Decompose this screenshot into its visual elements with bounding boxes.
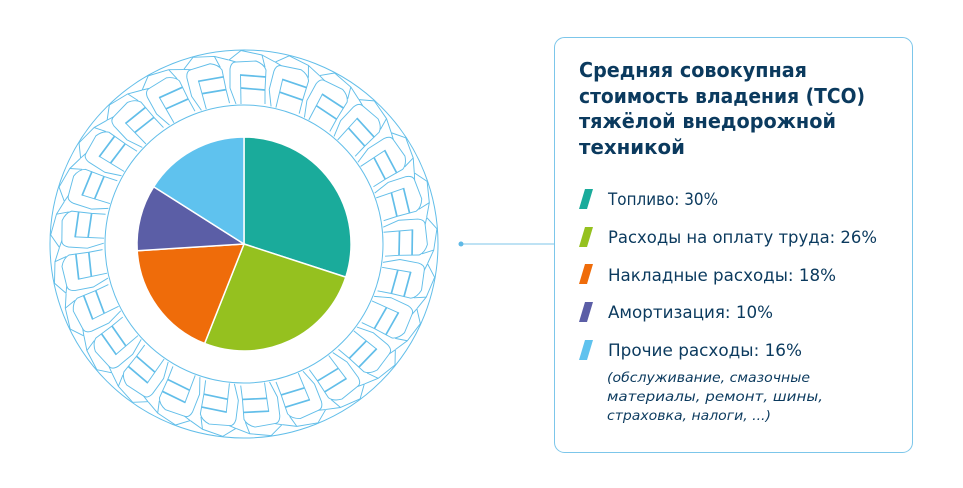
legend item: fuel <box>579 189 718 210</box>
legend item: depreciation: Амортизация: 10% <box>608 303 773 323</box>
slice: labour 26% <box>205 244 346 351</box>
pie chart <box>137 137 351 351</box>
note: other costs detail: страховка, налоги, ...) <box>607 408 771 424</box>
note: other costs detail <box>607 370 823 424</box>
panel: legend card <box>554 38 912 452</box>
legend item: other: Прочие расходы: 16% <box>608 341 802 361</box>
note: other costs detail: (обслуживание, смазочные <box>607 370 810 386</box>
tire illustration <box>48 49 439 440</box>
note: other costs detail: материалы, ремонт, шины, <box>607 389 823 405</box>
heading: тяжёлой внедорожной <box>579 109 836 133</box>
heading: стоимость владения (TCO) <box>579 84 865 108</box>
heading: Средняя совокупная <box>579 58 807 82</box>
legend item: labour: Расходы на оплату труда: 26% <box>608 228 877 248</box>
slice: overhead 18% <box>137 244 244 344</box>
slice: fuel 30% <box>244 137 351 277</box>
legend item: overhead: Накладные расходы: 18% <box>608 266 836 286</box>
heading: техникой <box>579 135 685 159</box>
legend item: fuel: Топливо: 30% <box>607 190 718 210</box>
slice: other 16% <box>154 137 244 244</box>
slice: depreciation 10% <box>137 187 244 251</box>
heading <box>579 58 865 159</box>
connector line with dot <box>458 242 554 246</box>
